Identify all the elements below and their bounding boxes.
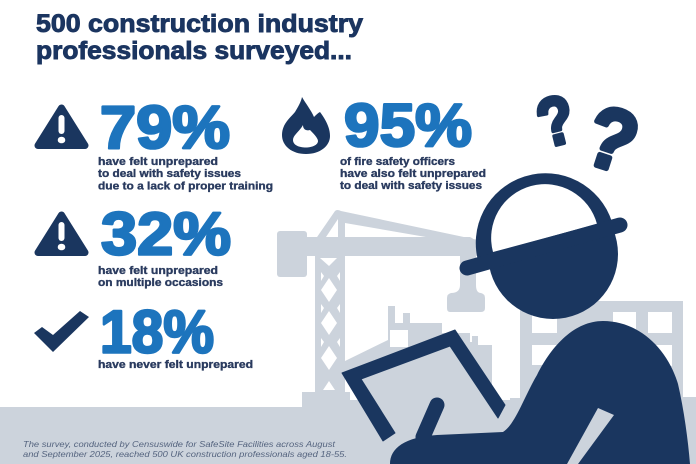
description [98, 265, 223, 289]
footnote [23, 439, 347, 459]
description: on multiple occasions [98, 277, 223, 289]
white gap between board and building [492, 345, 520, 398]
stat: 79% [38, 94, 273, 192]
stat: 95% [282, 92, 486, 192]
ground [0, 392, 696, 464]
description: have felt unprepared [98, 265, 218, 277]
stat: 32% [38, 200, 231, 289]
number: 18% [100, 298, 214, 366]
description: have felt unprepared [98, 156, 218, 168]
icon: warning triangle [38, 108, 85, 146]
number: 32% [101, 200, 231, 268]
description: of fire safety officers [340, 156, 455, 168]
description: to deal with safety issues [98, 168, 241, 180]
small building window [390, 330, 408, 347]
worker figure [342, 173, 690, 464]
description [340, 156, 486, 192]
sleeve slit [567, 408, 614, 464]
icon: warning triangle [38, 215, 85, 252]
icon: question marks: ? [529, 80, 583, 163]
footnote: and September 2025, reached 500 UK construction professionals aged 18-55. [23, 449, 347, 459]
footnote: The survey, conducted by Censuswide for SafeSite Facilities across August [23, 439, 336, 449]
small building [345, 306, 492, 400]
number: 79% [100, 94, 230, 161]
icon: flame [282, 97, 330, 154]
large building [520, 301, 683, 401]
icon: question marks [529, 80, 649, 193]
helmet [467, 173, 620, 268]
crane [277, 210, 485, 394]
title: professionals surveyed... [36, 37, 352, 65]
construction site background silhouette [0, 210, 696, 464]
description: have never felt unprepared [98, 359, 253, 371]
title: 500 construction industry [36, 10, 363, 38]
body and arm [390, 321, 690, 464]
number: 95% [344, 92, 472, 159]
description: due to a lack of proper training [98, 180, 273, 192]
head [488, 189, 618, 319]
pen hand [423, 405, 437, 437]
clipboard frame [342, 330, 505, 441]
stat: 18% [34, 298, 253, 371]
description [98, 156, 273, 192]
clipboard interior [361, 346, 505, 436]
description: to deal with safety issues [340, 180, 482, 192]
description: have also felt unprepared [340, 168, 486, 180]
icon: check mark [34, 311, 89, 352]
title [36, 10, 363, 65]
icon: question marks: ? [574, 87, 649, 193]
